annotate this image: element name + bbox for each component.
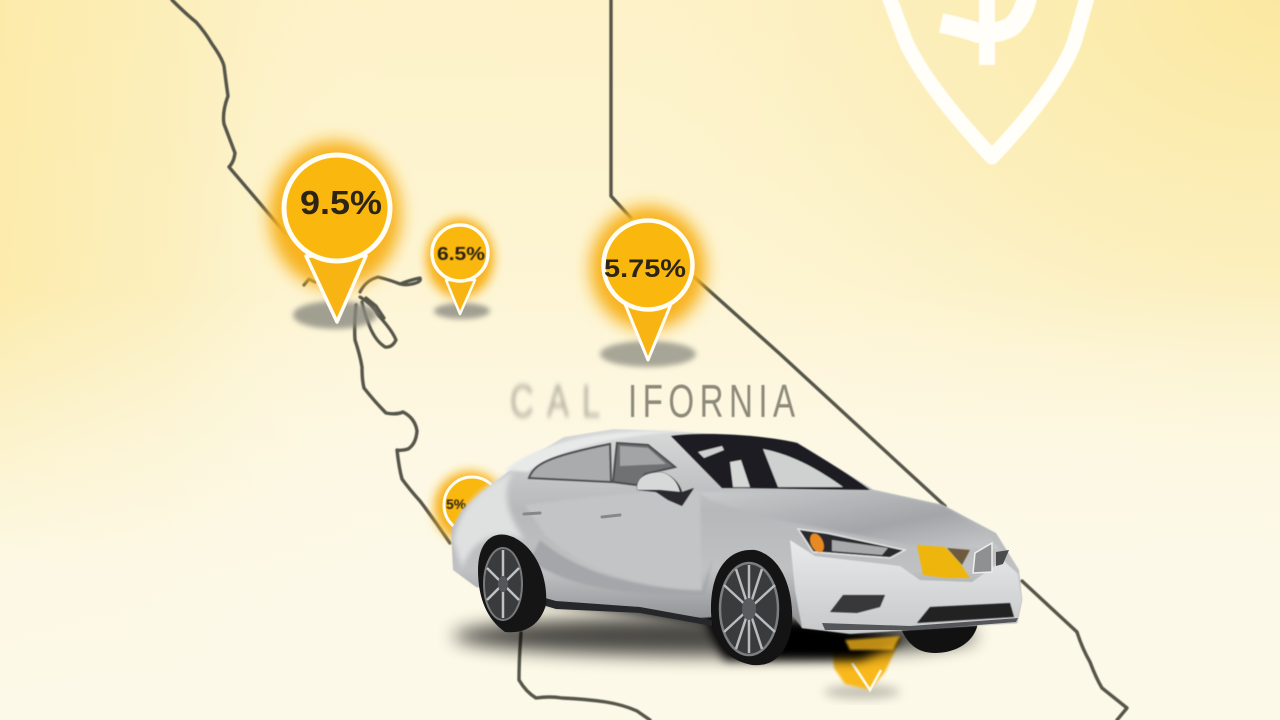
- pin: 9.5%: 9.5%: [300, 184, 382, 221]
- pin: 5.75%: 5.75%: [604, 255, 686, 283]
- pin tip under car: [824, 638, 901, 699]
- bay area inlets: [304, 277, 420, 347]
- pin: small value: 6.5%: [437, 244, 485, 264]
- map outline of California: [172, 0, 1127, 720]
- car: [451, 429, 1022, 699]
- lower intake: [917, 603, 1014, 623]
- state label: California: CAL: [510, 377, 613, 427]
- side windows: [529, 443, 675, 485]
- door sculpting: [525, 490, 702, 590]
- car body: [451, 429, 1022, 632]
- shield outline: [888, 0, 1088, 157]
- shield icon with dollar sign: [888, 0, 1088, 157]
- fog lamp: [830, 595, 885, 613]
- far front wheel: [900, 622, 978, 653]
- dollar sign: [941, 0, 1028, 33]
- headlight: [798, 529, 905, 558]
- south-eastern border: [1022, 581, 1127, 720]
- pin: 5.75%: [590, 206, 706, 367]
- rear quarter highlight: [453, 470, 525, 568]
- ground shadow: [453, 598, 977, 660]
- yellow pin showing through grille: [917, 545, 970, 578]
- hood: [698, 491, 1000, 550]
- pin: partly hidden behind car: 5%: [446, 496, 467, 512]
- state label: California: [510, 377, 801, 427]
- roof highlight: [505, 431, 690, 472]
- pin: small value: [426, 218, 494, 319]
- pin: partly hidden behind car: [434, 471, 506, 543]
- pin: 9.5%: [269, 141, 401, 329]
- far headlight: [996, 550, 1009, 566]
- grille: [973, 543, 992, 573]
- southern coastline below car: [519, 633, 650, 720]
- north-west coastline: [172, 0, 286, 234]
- state label: California: IFORNIA: [628, 377, 801, 427]
- front bumper: [790, 540, 1022, 634]
- rear wheel: [478, 535, 546, 632]
- windshield: [671, 434, 870, 490]
- wing mirror: [637, 472, 694, 506]
- front wheel: [711, 550, 792, 665]
- rocker panel: [545, 598, 712, 626]
- eastern border: [611, 0, 945, 506]
- door handles: [524, 513, 620, 517]
- central coastline: [355, 305, 450, 543]
